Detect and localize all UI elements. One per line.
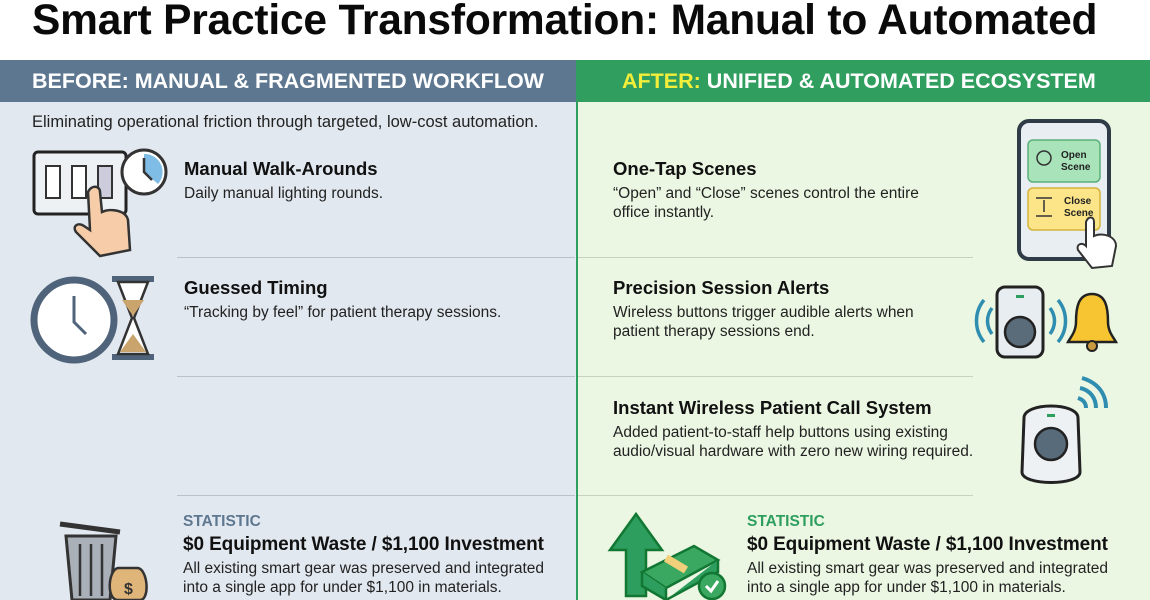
icon: phone with scenes: Close [1064,196,1092,207]
item: instant wireless patient call system: audio/visual hardware with zero new wiring required. [613,443,973,460]
statistic: after: STATISTIC [747,513,825,530]
icon: phone with scenes: Scene [1061,162,1091,173]
icon: clock and hourglass [30,276,154,364]
item: instant wireless patient call system: Instant Wireless Patient Call System [613,397,932,418]
header: after [576,60,1150,102]
statistic: before [183,513,544,596]
item: one-tap scenes: office instantly. [613,204,714,221]
panel: before [0,60,576,600]
panel: after [576,60,1150,600]
statistic: after: $0 Equipment Waste / $1,100 Investment [747,534,1108,555]
item: instant wireless patient call system: Added patient-to-staff help buttons using existing [613,424,948,441]
icon: phone with scenes: Open [1061,150,1087,161]
statistic: after [747,513,1108,596]
statistic: after: All existing smart gear was preserved and integrated [747,560,1108,577]
icon: patient call button [1020,376,1108,484]
item: guessed timing: “Tracking by feel” for patient therapy sessions. [184,304,501,321]
item: manual walk-arounds [184,158,383,202]
icon: phone with scenes [1017,119,1117,269]
statistic: before: into a single app for under $1,100 in materials. [183,579,502,596]
item: manual walk-arounds: Daily manual lighting rounds. [184,185,383,202]
header: after: AFTER: UNIFIED & AUTOMATED ECOSYSTEM [622,69,1096,93]
header: before [0,60,576,102]
statistic: before: $0 Equipment Waste / $1,100 Investment [183,534,544,555]
item: instant wireless patient call system [613,397,973,460]
item: precision session alerts [613,277,914,340]
intro text: Eliminating operational friction through targeted, low-cost automation. [32,113,538,131]
statistic: before: All existing smart gear was preserved and integrated [183,560,544,577]
statistic: before: STATISTIC [183,513,261,530]
icon: light switch with hand and clock [32,148,168,258]
item: guessed timing: Guessed Timing [184,277,328,298]
statistic: after: into a single app for under $1,100 in materials. [747,579,1066,596]
item: guessed timing [184,277,501,321]
item: one-tap scenes [613,158,919,221]
item: precision session alerts: Precision Session Alerts [613,277,829,298]
icon: phone with scenes: Scene [1064,208,1094,219]
item: precision session alerts: patient therapy sessions end. [613,323,815,340]
item: precision session alerts: Wireless buttons trigger audible alerts when [613,304,914,321]
icon: wireless button and bell [974,286,1118,358]
header: before: BEFORE: MANUAL & FRAGMENTED WORKFLOW [32,69,544,93]
item: one-tap scenes: “Open” and “Close” scenes control the entire [613,185,919,202]
item: manual walk-arounds: Manual Walk-Arounds [184,158,378,179]
item: one-tap scenes: One-Tap Scenes [613,158,757,179]
icon: trash can with money bag [60,522,148,600]
icon: up arrow with money stack [608,512,726,600]
icon: trash can with money bag: $ [124,581,133,598]
